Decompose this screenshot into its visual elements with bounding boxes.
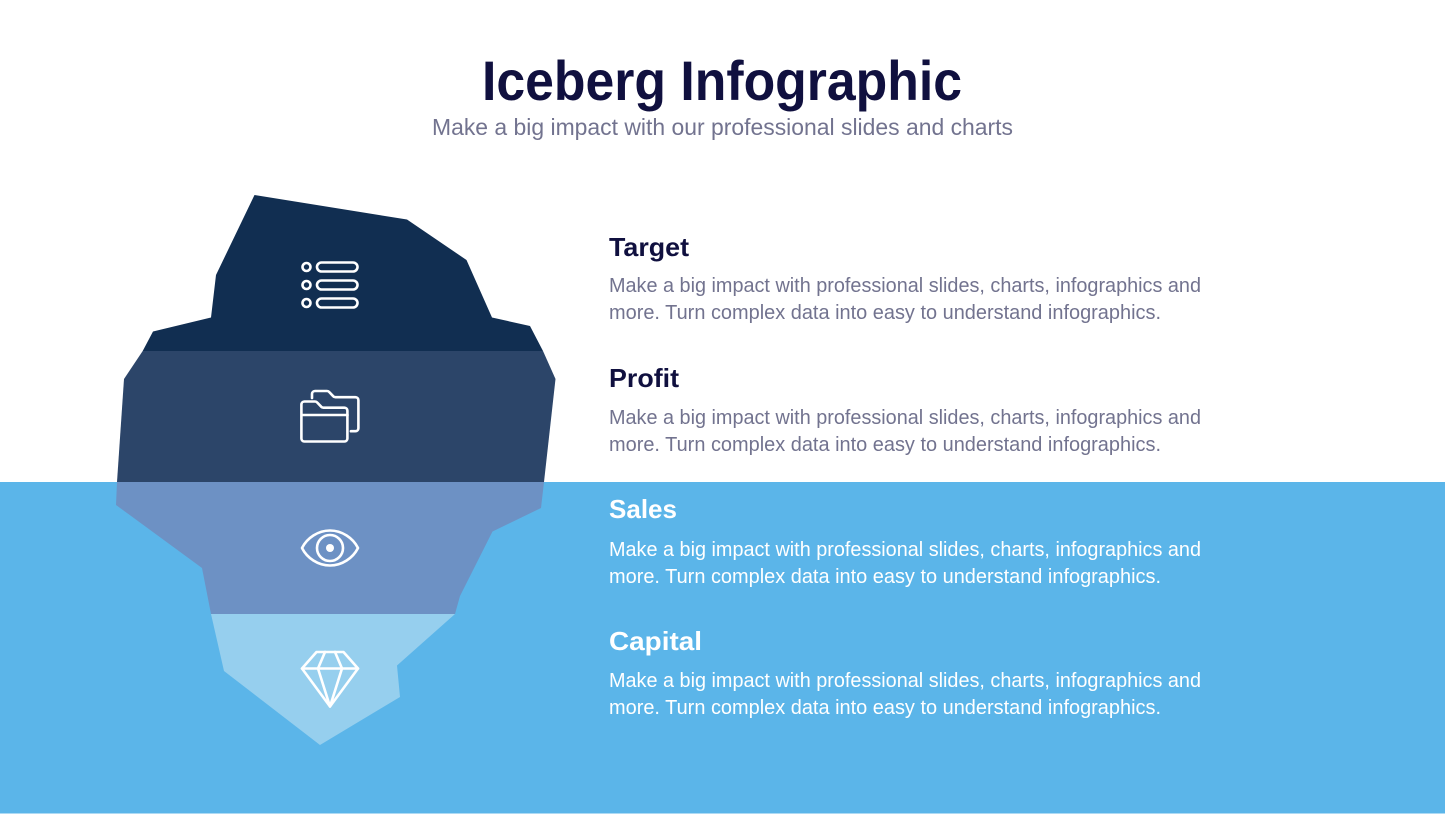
text block: Sales: Make a big impact with professional slides, charts, infographics and <box>609 539 1201 561</box>
text block: Capital: more. Turn complex data into easy to understand infographics. <box>609 697 1161 719</box>
icon: diamond <box>302 652 358 706</box>
text block: Profit: Make a big impact with professional slides, charts, infographics and <box>609 407 1201 429</box>
iceberg layer: second <box>117 351 556 482</box>
subtitle: Make a big impact with our professional slides and charts <box>432 114 1013 140</box>
icon: eye <box>302 530 358 566</box>
iceberg layer: top <box>143 195 543 351</box>
text block: Profit <box>609 363 1201 456</box>
text block: Target <box>609 232 1201 324</box>
text block: Capital: Capital <box>609 626 702 656</box>
text block: Capital <box>609 626 1201 719</box>
icon: list <box>302 262 358 308</box>
text block: Target: more. Turn complex data into easy to understand infographics. <box>609 302 1161 324</box>
text block: Sales: more. Turn complex data into easy to understand infographics. <box>609 566 1161 588</box>
water band <box>0 482 1445 814</box>
title: Iceberg Infographic <box>482 49 962 112</box>
text block: Profit: more. Turn complex data into easy to understand infographics. <box>609 434 1161 456</box>
text block: Sales <box>609 494 1201 588</box>
text block: Target: Make a big impact with professional slides, charts, infographics and <box>609 275 1201 297</box>
text block: Profit: Profit <box>609 363 679 393</box>
icon: folders <box>301 391 358 442</box>
text block: Target: Target <box>609 232 689 262</box>
iceberg layer: bottom <box>211 614 455 745</box>
text block: Capital: Make a big impact with professional slides, charts, infographics and <box>609 670 1201 692</box>
iceberg diagram <box>116 195 556 745</box>
text block: Sales: Sales <box>609 494 677 524</box>
iceberg layer: third <box>116 482 544 614</box>
